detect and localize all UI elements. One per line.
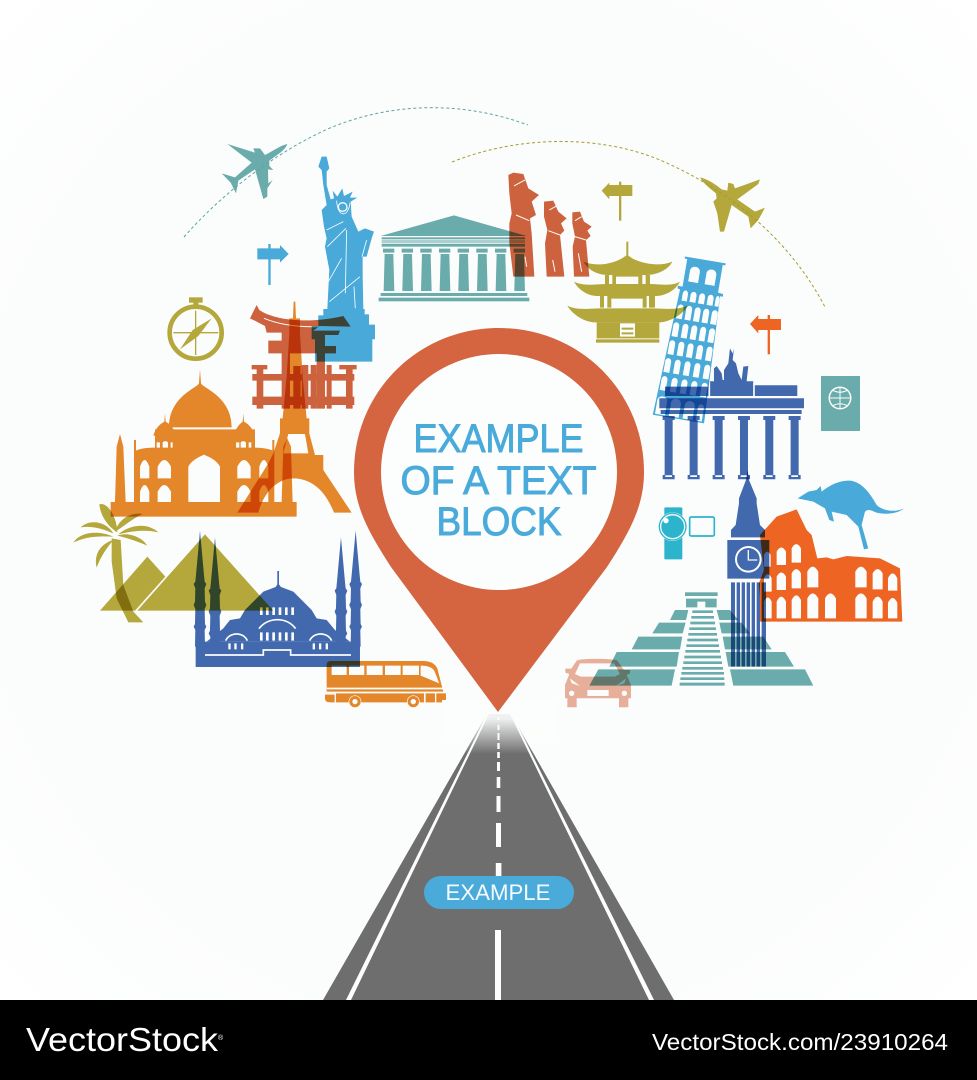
- mayan pyramid: [589, 592, 813, 686]
- colosseum: [759, 509, 902, 622]
- road label: EXAMPLE: [446, 880, 550, 905]
- watermark bar: VectorStock.com/23910264: [652, 1029, 948, 1055]
- watermark bar: [0, 1000, 977, 1080]
- map pin: [354, 328, 644, 712]
- icon: video camera: [658, 507, 714, 559]
- moai statues: [508, 173, 592, 277]
- icon: compass: [170, 297, 222, 359]
- icon: signpost blue: [257, 244, 289, 285]
- car: [565, 659, 631, 707]
- brandenburg gate: [659, 348, 804, 479]
- icon: passport: [821, 376, 860, 431]
- palm tree: [73, 504, 158, 622]
- road: [323, 700, 674, 1000]
- greek temple: [379, 215, 529, 301]
- big ben: [727, 470, 769, 667]
- icon: signpost orange: [750, 315, 781, 354]
- pin text block: BLOCK: [436, 500, 562, 544]
- pagoda: [567, 242, 688, 343]
- eiffel tower: [237, 302, 352, 513]
- kangaroo: [798, 481, 904, 549]
- icon: olive airplane: [700, 177, 765, 232]
- statue of liberty: [312, 157, 375, 362]
- pin text block: [400, 417, 596, 544]
- flight path: right dashed arc: [452, 141, 825, 307]
- road label: [424, 876, 574, 909]
- pin text block: OF A TEXT: [400, 459, 596, 503]
- watermark bar: VectorStock: [26, 1022, 218, 1059]
- bus: [325, 661, 446, 708]
- flight path: left dashed arc: [184, 108, 528, 237]
- icon: teal airplane: [222, 144, 287, 199]
- watermark bar: ®: [218, 1034, 224, 1042]
- pin text block: EXAMPLE: [414, 417, 584, 461]
- torii gate: [250, 305, 357, 409]
- taj mahal: [111, 369, 297, 517]
- icon: signpost olive: [602, 182, 632, 221]
- pyramids: [100, 534, 273, 611]
- blue mosque: [194, 531, 362, 667]
- leaning tower of pisa: [653, 256, 731, 423]
